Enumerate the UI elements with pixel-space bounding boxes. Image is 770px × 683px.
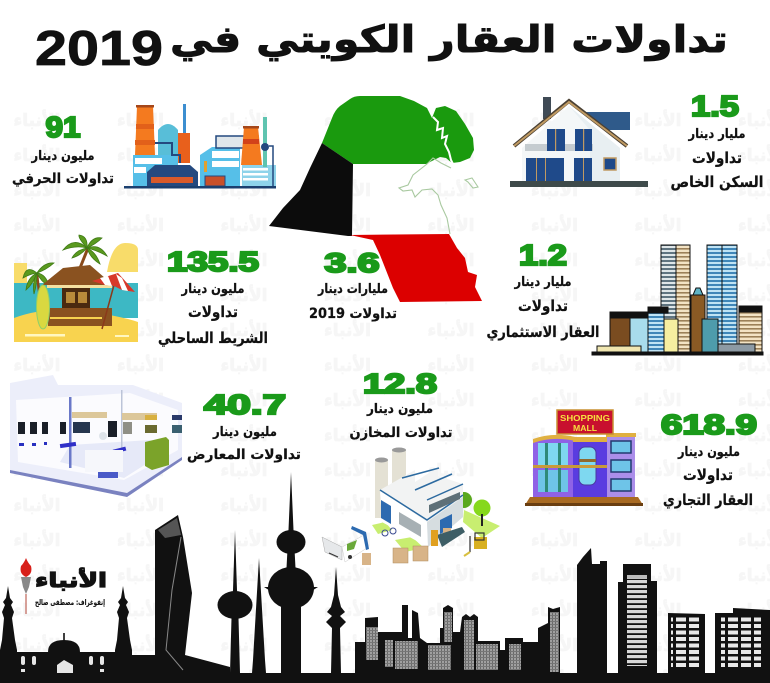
map: green region — [322, 96, 474, 164]
icon: flame pen — [21, 558, 31, 614]
label: investment property: العقار الاستثماري — [486, 323, 600, 342]
label: million dinars: مليون دينار — [677, 445, 740, 460]
skyline silhouette — [0, 472, 770, 683]
skyline: minaret tower — [326, 567, 346, 673]
icon: house — [510, 97, 648, 187]
value: 91: 91 — [46, 112, 80, 144]
label: warehouses trading: تداولات المخازن — [350, 425, 452, 441]
item: warehouses — [322, 368, 500, 565]
item: exhibitions — [10, 375, 301, 497]
label: million dinars: مليون دينار — [181, 282, 244, 297]
label: trading: تداولات — [188, 303, 238, 321]
item: commercial property — [525, 409, 757, 510]
value: 1.5: 1.5 — [691, 91, 739, 123]
label: crafts trading: تداولات الحرفي — [12, 171, 114, 187]
item: total 2019 — [309, 248, 397, 322]
label: coastal strip: الشريط الساحلي — [158, 329, 268, 347]
title — [35, 18, 728, 76]
label: billion dinars: مليار دينار — [688, 127, 746, 142]
label: trading: تداولات — [683, 466, 733, 484]
value: 12.8: 12.8 — [363, 368, 437, 399]
label: trading: تداولات — [692, 149, 742, 167]
label: commercial property: العقار التجاري — [663, 491, 753, 510]
value: 1.2: 1.2 — [519, 240, 567, 272]
skyline: mosque and minarets — [0, 586, 156, 673]
item: private housing — [510, 91, 764, 191]
value: 3.6: 3.6 — [324, 248, 380, 278]
icon: exhibition booth — [10, 375, 182, 497]
label: private housing: السكن الخاص — [670, 173, 764, 191]
label: exhibitions trading: تداولات المعارض — [187, 447, 301, 463]
label: billions of dinars: مليارات دينار — [317, 282, 388, 297]
icon: shopping mall — [525, 410, 643, 506]
map of Kuwait in flag colours — [269, 96, 482, 302]
title: 2019 — [35, 22, 163, 76]
icon: beach hut — [14, 235, 138, 342]
skyline: Kuwait Towers — [218, 472, 318, 675]
label: million dinars: مليون دينار — [366, 402, 433, 417]
label: million dinars: مليون دينار — [212, 425, 277, 440]
skyline: Al Hamra tower — [155, 515, 230, 673]
value: 135.5: 135.5 — [167, 246, 259, 277]
skyline: right towers — [577, 548, 770, 673]
map: black region — [269, 143, 353, 236]
value: 618.9: 618.9 — [661, 409, 757, 440]
logo and credit — [21, 558, 107, 614]
map: white region outline — [399, 158, 478, 234]
title: تداولات العقار الكويتي في — [170, 18, 728, 61]
icon: shopping mall: SHOPPING — [560, 413, 610, 423]
logo wordmark: الأنباء — [35, 567, 107, 592]
icon: city towers — [592, 245, 763, 355]
map: red region — [350, 234, 482, 302]
skyline: ground — [0, 673, 770, 683]
item: coastal strip — [14, 235, 268, 347]
label: trading: تداولات — [518, 297, 568, 315]
skyline: left building cluster — [355, 605, 560, 673]
item: crafts — [12, 104, 276, 188]
label: million dinars: مليون دينار — [31, 149, 94, 164]
icon: shopping mall: MALL — [573, 423, 597, 433]
credit: إنفوغراف: مصطفى صالح — [35, 598, 105, 607]
map: channel line — [433, 117, 454, 166]
value: 40.7: 40.7 — [204, 389, 286, 420]
icon: warehouse — [322, 448, 500, 565]
item: investment — [486, 240, 763, 355]
label: 2019 trading: تداولات 2019 — [309, 306, 397, 322]
label: billion dinars: مليار دينار — [514, 275, 572, 290]
icon: factory — [124, 104, 276, 188]
